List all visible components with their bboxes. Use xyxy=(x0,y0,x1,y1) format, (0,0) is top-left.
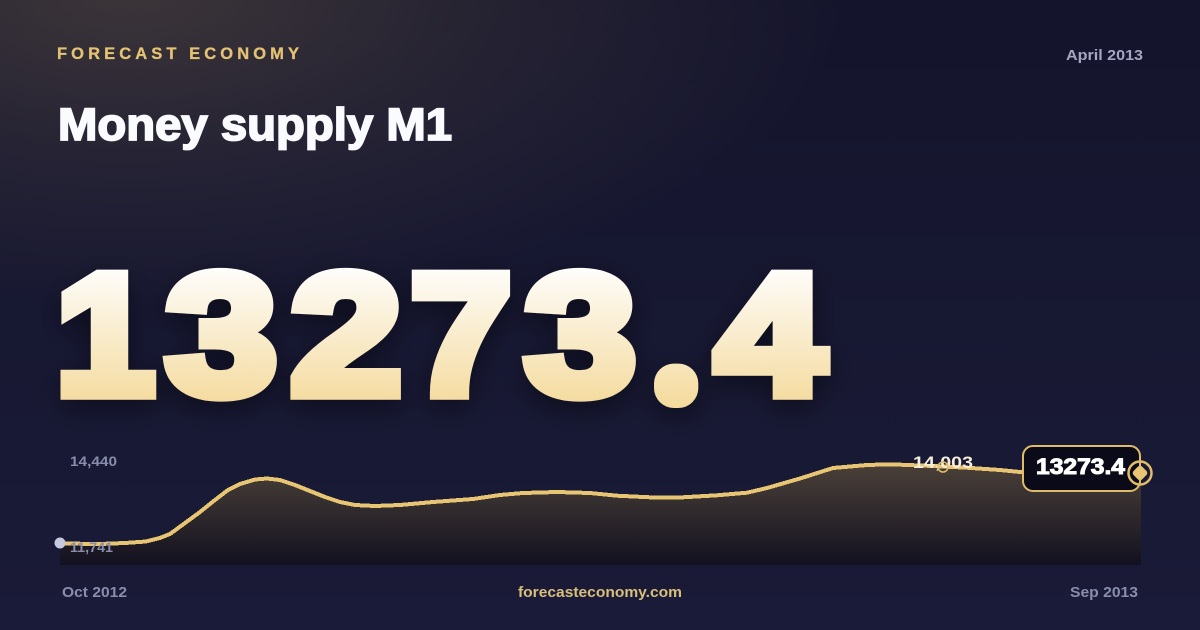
brand eyebrow: FORECAST ECONOMY xyxy=(57,45,299,63)
big value: 4 xyxy=(716,239,824,430)
title: Money supply M1 xyxy=(58,99,452,150)
start point xyxy=(54,538,66,548)
peak marker xyxy=(938,462,948,472)
end point marker xyxy=(1128,462,1152,484)
chart line xyxy=(60,464,1140,544)
big value xyxy=(56,239,824,430)
max label: 14,440 xyxy=(70,454,117,469)
chart area fill xyxy=(60,464,1141,565)
peak label: 14,003 xyxy=(913,453,973,472)
value badge: 13273.4 xyxy=(1036,454,1126,479)
big value: 1 xyxy=(56,239,155,430)
start date: Oct 2012 xyxy=(62,584,127,601)
website: forecasteconomy.com xyxy=(518,584,682,601)
area chart xyxy=(54,446,1152,565)
big value: 3 xyxy=(166,240,277,430)
date: April 2013 xyxy=(1066,47,1143,64)
min label: 11,741 xyxy=(70,540,114,555)
big value: 7 xyxy=(411,239,511,430)
big value: 3 xyxy=(525,240,636,430)
big value: . xyxy=(672,362,680,395)
big value: 2 xyxy=(291,240,402,430)
end date: Sep 2013 xyxy=(1070,584,1138,601)
value badge xyxy=(1023,446,1140,491)
